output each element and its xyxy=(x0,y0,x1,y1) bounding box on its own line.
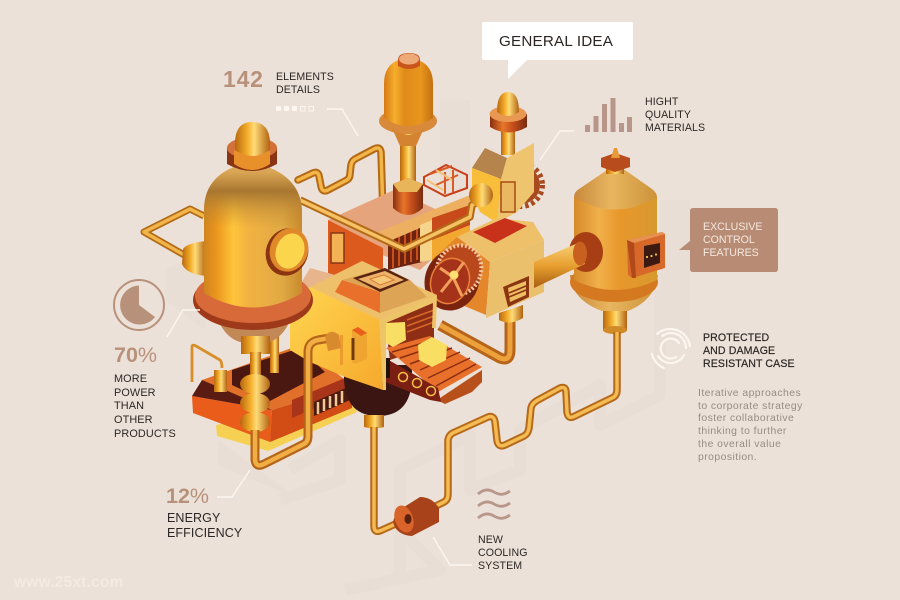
paragraph xyxy=(698,388,803,463)
label: hight quality materials: QUALITY xyxy=(645,109,691,121)
box left face xyxy=(290,287,383,390)
cube front xyxy=(418,337,447,367)
stat: 70 percent: POWER xyxy=(114,387,156,399)
control screen xyxy=(644,243,660,268)
callout: exclusive control features xyxy=(679,208,778,272)
paragraph: foster collaborative xyxy=(698,413,794,424)
box frame xyxy=(379,295,437,390)
stat: 70 percent: PRODUCTS xyxy=(114,428,176,440)
top tank xyxy=(379,53,437,215)
stat: 12 percent xyxy=(166,484,243,540)
stat: 142 elements details: DETAILS xyxy=(276,84,320,96)
title: GENERAL IDEA xyxy=(499,33,614,50)
icon: pie chart xyxy=(114,280,164,330)
lower pipe loop from gear block xyxy=(440,318,510,359)
handle xyxy=(192,345,222,382)
stat: 70 percent: 70% xyxy=(114,343,157,367)
cap xyxy=(398,53,420,69)
finial collar xyxy=(601,153,630,172)
block front xyxy=(486,240,544,318)
long pipe xyxy=(300,200,482,249)
joint xyxy=(469,183,493,207)
stat: 12 percent: 12% xyxy=(166,484,209,508)
icon: cog gear xyxy=(500,164,542,206)
icon: protection rings xyxy=(652,329,690,368)
lower neck xyxy=(603,305,627,331)
paragraph: proposition. xyxy=(698,452,757,463)
top back xyxy=(202,345,352,410)
label: protected case: RESISTANT CASE xyxy=(703,358,795,370)
flange xyxy=(193,270,313,330)
lid right slope xyxy=(342,268,427,313)
label: protected case: AND DAMAGE xyxy=(703,345,775,357)
pipe joint xyxy=(325,332,341,351)
paragraph: to corporate strategy xyxy=(698,401,803,412)
central block xyxy=(300,190,478,300)
cap xyxy=(235,122,270,156)
control box xyxy=(627,232,665,278)
porthole glass xyxy=(271,229,309,273)
dark top xyxy=(192,380,272,410)
label: hight quality materials: HIGHT xyxy=(645,96,679,108)
icon: cooling waves xyxy=(478,490,510,518)
orange side xyxy=(192,396,272,442)
side stripe xyxy=(340,335,343,365)
label: protected case: PROTECTED xyxy=(703,332,769,344)
finial tip xyxy=(611,148,620,158)
vent slot xyxy=(292,378,345,418)
label: new cooling system: COOLING xyxy=(478,547,528,559)
collar xyxy=(379,108,437,134)
top collar xyxy=(227,147,277,171)
stat: 142 elements details: ELEMENTS xyxy=(276,71,334,83)
belt side xyxy=(385,358,441,402)
block left dark xyxy=(432,237,490,315)
block left slant xyxy=(472,148,507,179)
porthole ring xyxy=(259,222,315,282)
left loop pipe xyxy=(144,209,204,256)
watermark: www.25xt.com xyxy=(13,574,124,591)
label: new cooling system: SYSTEM xyxy=(478,560,522,572)
icon: side nozzle xyxy=(182,241,206,276)
gear block xyxy=(416,218,544,318)
label: hight quality materials xyxy=(585,96,705,134)
stat: 70 percent xyxy=(114,343,176,440)
lid front slope xyxy=(335,280,380,313)
pipe ring xyxy=(569,232,603,272)
drop shadows of machine xyxy=(165,100,690,590)
callout: exclusive control features: EXCLUSIVE xyxy=(703,221,762,233)
yellow box xyxy=(290,261,447,390)
finial stem xyxy=(606,160,624,174)
label: new cooling system xyxy=(478,534,528,572)
conveyor xyxy=(385,302,482,404)
knob collar xyxy=(490,114,527,132)
leader lines xyxy=(167,109,574,565)
base cylinder xyxy=(393,178,423,215)
stat: 12 percent: EFFICIENCY xyxy=(167,526,243,540)
tank body xyxy=(384,58,433,126)
block top plate xyxy=(328,190,470,270)
callout: exclusive control features: CONTROL xyxy=(703,234,755,246)
column with beads xyxy=(240,336,270,432)
box lid xyxy=(310,261,437,320)
speech bubble: general idea xyxy=(482,22,633,79)
sphere nozzle xyxy=(364,415,384,428)
zigzag pipe upper xyxy=(298,148,383,212)
belt roller side xyxy=(437,370,482,404)
long lower pipe xyxy=(374,332,617,531)
cone top xyxy=(574,170,657,210)
box interior xyxy=(385,302,434,360)
knob xyxy=(497,92,519,116)
dome shade xyxy=(204,162,302,308)
tank body xyxy=(204,162,302,308)
back post xyxy=(270,325,279,373)
block top xyxy=(457,218,544,262)
icon: bars xyxy=(585,98,632,132)
dark sphere xyxy=(344,365,412,416)
stat: 142 elements details: 142 xyxy=(223,66,264,92)
bracket xyxy=(331,233,344,263)
right tank xyxy=(534,148,665,334)
lid window xyxy=(353,268,409,292)
paragraph: thinking to further xyxy=(698,426,787,437)
cube back xyxy=(386,322,406,347)
vent plate xyxy=(503,276,529,307)
handle post xyxy=(214,370,227,392)
belt xyxy=(386,336,482,392)
stat: 70 percent: MORE xyxy=(114,373,147,385)
block left edge xyxy=(385,358,390,378)
pipe to right tank xyxy=(534,243,585,288)
callout: exclusive control features: FEATURES xyxy=(703,247,759,259)
stat: 70 percent: THAN xyxy=(114,400,144,412)
label: hight quality materials: MATERIALS xyxy=(645,122,705,134)
block right xyxy=(497,143,534,223)
yellow underlay xyxy=(216,400,357,451)
stat: 142 elements details xyxy=(223,66,334,111)
gear block nozzle xyxy=(499,305,523,323)
neck xyxy=(400,130,416,184)
lower cone xyxy=(570,275,658,311)
vent xyxy=(388,222,422,270)
bracket xyxy=(501,182,515,212)
body xyxy=(574,197,657,290)
copper cylinder xyxy=(391,497,439,536)
lower cone xyxy=(218,320,290,342)
stat: 12 percent: ENERGY xyxy=(167,511,221,525)
upper gold block xyxy=(469,92,534,223)
block left wall xyxy=(328,220,383,290)
coil wires xyxy=(424,165,467,196)
side switch xyxy=(352,327,367,364)
base block left xyxy=(192,345,357,451)
stat: 70 percent: OTHER xyxy=(114,414,153,426)
paragraph: Iterative approaches xyxy=(698,388,801,399)
label: protected case xyxy=(703,332,795,370)
fan xyxy=(416,242,488,318)
paragraph: the overall value xyxy=(698,439,781,450)
left tank xyxy=(193,122,315,342)
lower left pipe xyxy=(255,338,330,465)
label: new cooling system: NEW xyxy=(478,534,503,546)
icon: detail squares xyxy=(276,106,314,111)
flange xyxy=(570,262,658,302)
knob neck xyxy=(501,130,515,155)
